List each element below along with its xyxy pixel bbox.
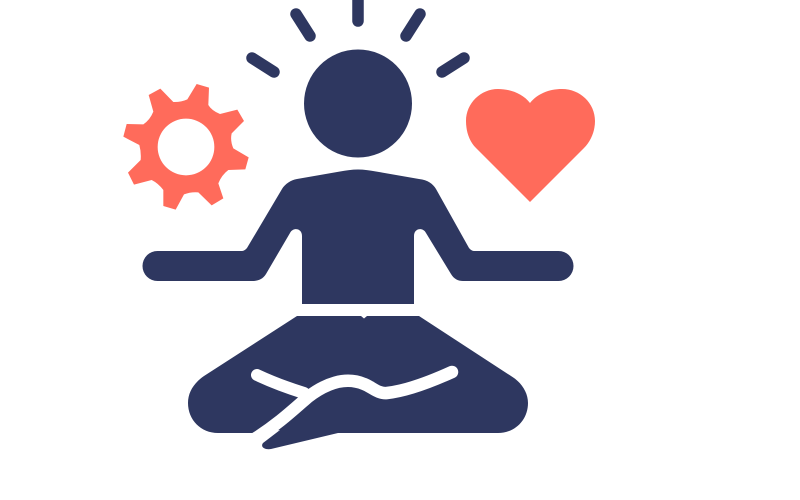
icon: heart	[466, 89, 595, 202]
crossed legs	[188, 316, 528, 449]
icon: radiating lines above head	[252, 0, 464, 72]
leg crease lines	[257, 375, 304, 393]
icon: gear	[123, 84, 249, 210]
head	[304, 50, 412, 158]
figure: meditating person	[143, 50, 574, 449]
torso and arms	[143, 170, 574, 304]
